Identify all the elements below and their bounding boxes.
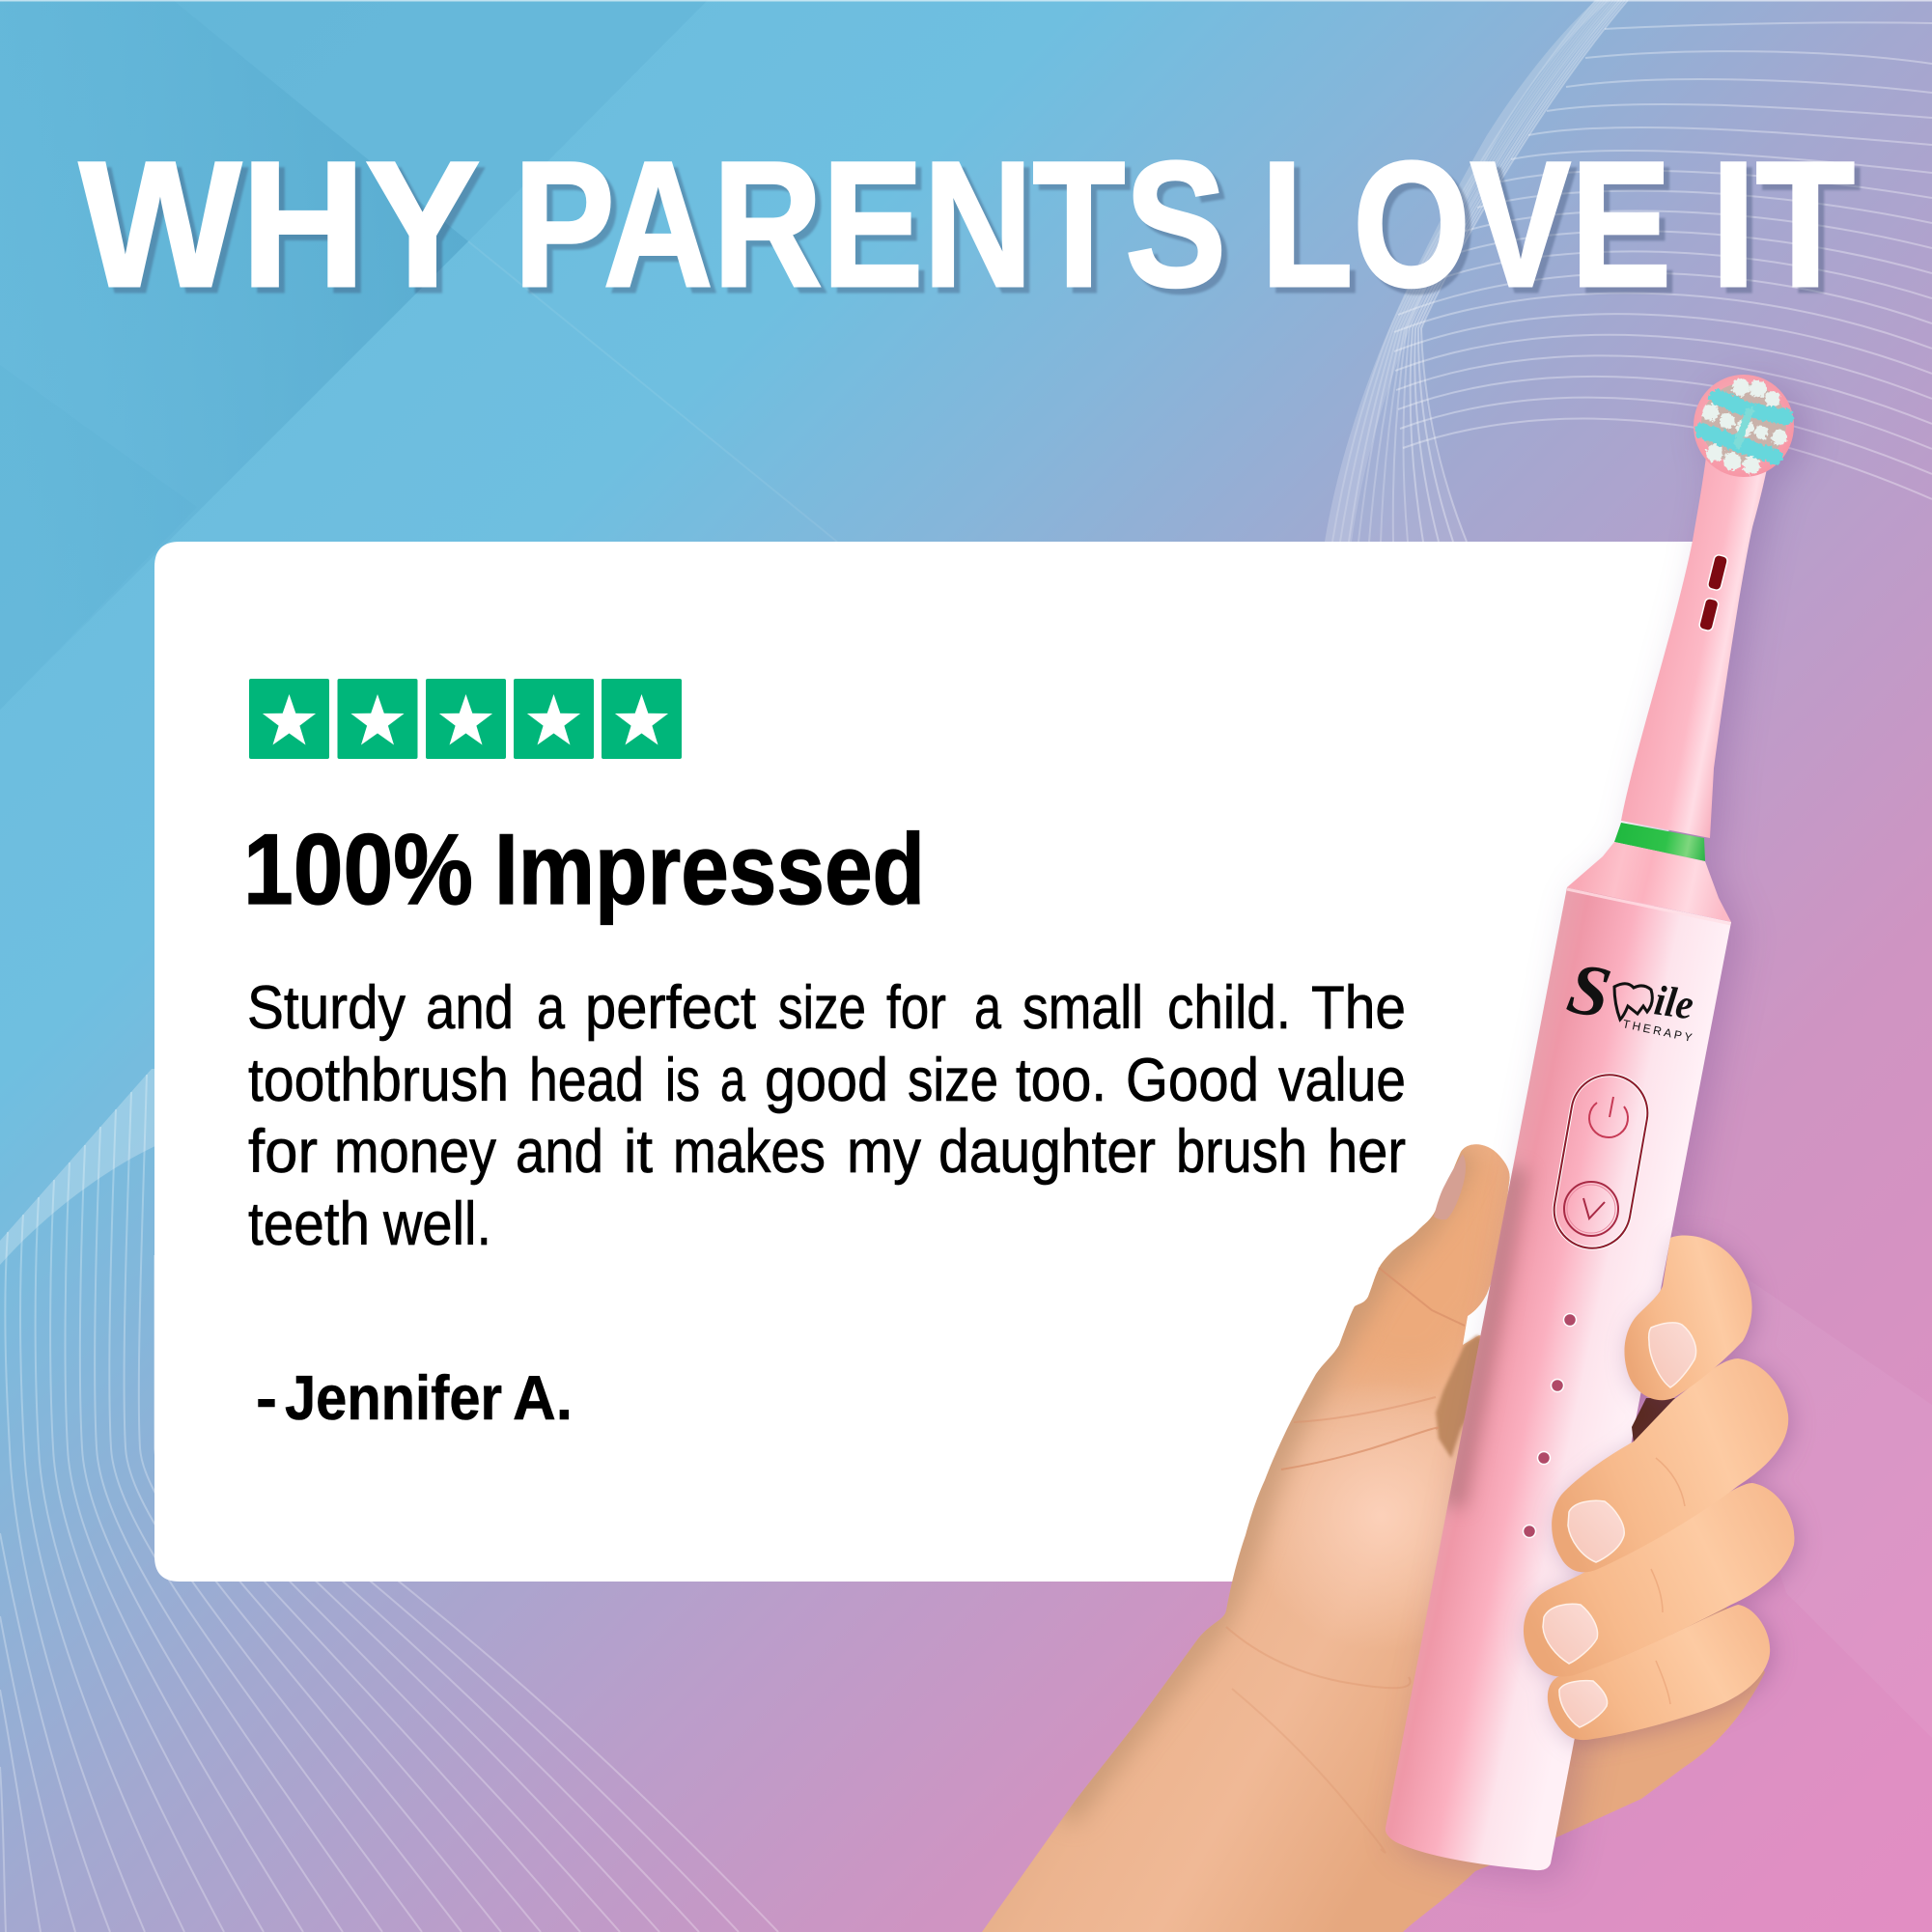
icon: volume: [1564, 1182, 1618, 1236]
wave pattern: top right: [1325, 0, 1932, 542]
finger 1: [1624, 1236, 1752, 1400]
title: WHY: [79, 126, 480, 324]
hand: fingers: [1524, 1236, 1794, 1740]
review body text: money: [334, 1118, 496, 1186]
review author: A.: [513, 1362, 573, 1433]
review body text: small: [1022, 974, 1143, 1042]
review body text: a: [537, 974, 566, 1042]
title: LOVE: [1261, 126, 1671, 324]
review body text: it: [624, 1118, 653, 1186]
finger 4: [1548, 1605, 1770, 1740]
icon: star 1: [249, 679, 329, 759]
vent slots: [1698, 554, 1728, 631]
review body text: [247, 974, 1406, 1258]
title: IT: [1711, 126, 1855, 324]
review body text: and: [426, 974, 514, 1042]
review body text: too.: [1016, 1047, 1106, 1114]
shadow from thumb on handle: [1453, 889, 1731, 1506]
dark gap between fingers: [1632, 1398, 1675, 1443]
title: PARENTS: [514, 126, 1226, 324]
review body text: child.: [1167, 974, 1291, 1042]
review body text: my: [847, 1118, 921, 1186]
finger 3: [1524, 1483, 1794, 1677]
icon: star 5: [602, 679, 682, 759]
logo: Smile Therapy: ile: [1652, 976, 1696, 1028]
palm highlight: [1274, 1407, 1459, 1624]
review body text: brush: [1176, 1118, 1307, 1186]
review body text: her: [1328, 1118, 1406, 1186]
title: [79, 126, 1855, 324]
handle: [1386, 887, 1731, 1870]
five star rating: [249, 679, 682, 759]
brush stem: [1621, 434, 1772, 838]
review body text: is: [665, 1047, 700, 1114]
review body text: teeth: [248, 1190, 370, 1258]
icon: star 2: [338, 679, 417, 759]
icon: power: [1589, 1097, 1628, 1137]
logo: Smile Therapy: S: [1561, 947, 1617, 1034]
review body text: head: [529, 1047, 644, 1114]
left edge shading: [1062, 1152, 1461, 1815]
review body text: Good: [1126, 1047, 1259, 1114]
review body text: a: [720, 1047, 746, 1114]
review body text: for: [886, 974, 946, 1042]
review body text: The: [1311, 974, 1406, 1042]
shoulder: [1567, 842, 1731, 922]
brush head: [1694, 375, 1794, 477]
review body text: daughter: [938, 1118, 1156, 1186]
icon: star 3: [426, 679, 506, 759]
review heading: Impressed: [494, 814, 925, 926]
review body text: a: [974, 974, 1002, 1042]
review body text: well.: [382, 1190, 491, 1258]
review body text: good: [765, 1047, 888, 1114]
review body text: toothbrush: [248, 1047, 509, 1114]
green ring: [1614, 823, 1705, 861]
logo: Smile Therapy: THERAPY: [1621, 1017, 1694, 1045]
button panel: [1548, 1069, 1654, 1254]
thumb colour: [1323, 1144, 1510, 1398]
review body text: size: [778, 974, 866, 1042]
indicator dots: [1524, 1313, 1576, 1537]
review heading: 100%: [243, 814, 473, 926]
review body text: perfect: [585, 974, 756, 1042]
icon: star 4: [514, 679, 594, 759]
review body text: value: [1278, 1047, 1406, 1114]
hand: palm, thumb and wrist: [966, 1130, 1796, 1932]
review body text: makes: [673, 1118, 826, 1186]
review body text: size: [908, 1047, 998, 1114]
review body text: for: [248, 1118, 318, 1186]
thumb nail: [1434, 1154, 1466, 1219]
palm fold behind thumb: [1436, 1335, 1506, 1458]
wave pattern: bottom left: [0, 1069, 778, 1932]
review author: Jennifer: [285, 1362, 502, 1433]
panel: review card: [154, 542, 1719, 1582]
review heading: [243, 814, 925, 926]
review author: -: [256, 1362, 277, 1433]
review body text: Sturdy: [247, 974, 406, 1042]
logo: Smile Therapy: [1561, 947, 1696, 1045]
toothbrush: [1386, 375, 1794, 1870]
review body text: and: [516, 1118, 603, 1186]
finger 2: [1552, 1358, 1788, 1572]
